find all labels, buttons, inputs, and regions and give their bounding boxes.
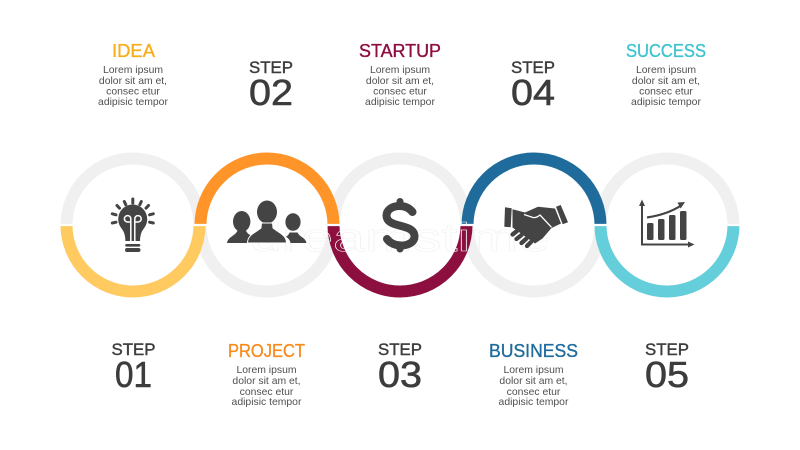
body: PROJECT: Lorem ipsum [236,365,297,376]
icon: group of people [227,200,306,243]
gaps between upper and lower arcs [58,224,742,226]
icon: growth chart [639,200,694,248]
label: STEP 01 [112,341,156,395]
watermark: dreamstime [250,216,550,260]
body: PROJECT: consec etur [240,387,294,398]
body: PROJECT: dolor sit am et, [232,376,301,387]
ring track 5 [600,158,734,292]
body: PROJECT: adipisic tempor [232,397,302,408]
arc: orange upper half [200,159,334,225]
icon: dollar sign [386,202,414,249]
text block: BUSINESS [489,340,578,408]
number: 03: 03 [378,354,422,395]
label: STEP 02 [249,59,293,113]
text block: IDEA [98,40,168,108]
body: BUSINESS: Lorem ipsum [503,365,564,376]
number: 02: 02 [249,72,293,113]
ring track 3 [334,158,466,292]
chain of rings [66,158,734,292]
body: SUCCESS: dolor sit am et, [632,76,700,87]
number: 05: 05 [645,354,689,395]
ring track 1 [66,158,200,292]
word: STEP: STEP [249,59,293,77]
word: STEP: STEP [378,341,422,359]
label: STEP 03 [378,341,422,395]
arc: yellow lower half [66,225,200,292]
word: STEP: STEP [112,341,156,359]
heading: SUCCESS: SUCCESS [626,40,706,61]
ring track 2 [200,158,334,292]
body: STARTUP: dolor sit am et, [366,76,434,87]
body: IDEA: Lorem ipsum [103,65,163,76]
text block: STARTUP [359,40,441,108]
word: STEP: STEP [645,341,689,359]
body: STARTUP: consec etur [373,86,427,98]
heading: IDEA: IDEA [112,40,156,61]
heading: PROJECT: PROJECT [228,340,305,361]
heading: STARTUP: STARTUP [359,40,441,61]
body: STARTUP: adipisic tempor [365,97,435,108]
icon: light bulb [112,199,153,252]
text block: PROJECT [228,340,305,408]
text block: SUCCESS [626,40,706,108]
body: SUCCESS: adipisic tempor [631,97,701,108]
word: STEP: STEP [511,59,555,77]
arc: blue upper half [468,159,600,225]
arc: teal lower half [600,225,734,292]
icon: handshake [504,205,568,246]
body: BUSINESS: adipisic tempor [499,397,569,408]
body: SUCCESS: Lorem ipsum [636,65,696,76]
body: IDEA: consec etur [106,86,160,98]
body: IDEA: adipisic tempor [98,97,168,108]
label: STEP 05 [645,341,689,395]
body: SUCCESS: consec etur [639,86,693,98]
arc: maroon lower half [334,225,466,292]
label: STEP 04 [511,59,555,113]
body: BUSINESS: dolor sit am et, [499,376,568,387]
body: STARTUP: Lorem ipsum [370,65,430,76]
ring track 4 [468,158,600,292]
body: BUSINESS: consec etur [507,387,561,398]
number: 01: 01 [115,354,152,395]
body: IDEA: dolor sit am et, [99,76,167,87]
heading: BUSINESS: BUSINESS [489,340,578,361]
number: 04: 04 [511,72,555,113]
